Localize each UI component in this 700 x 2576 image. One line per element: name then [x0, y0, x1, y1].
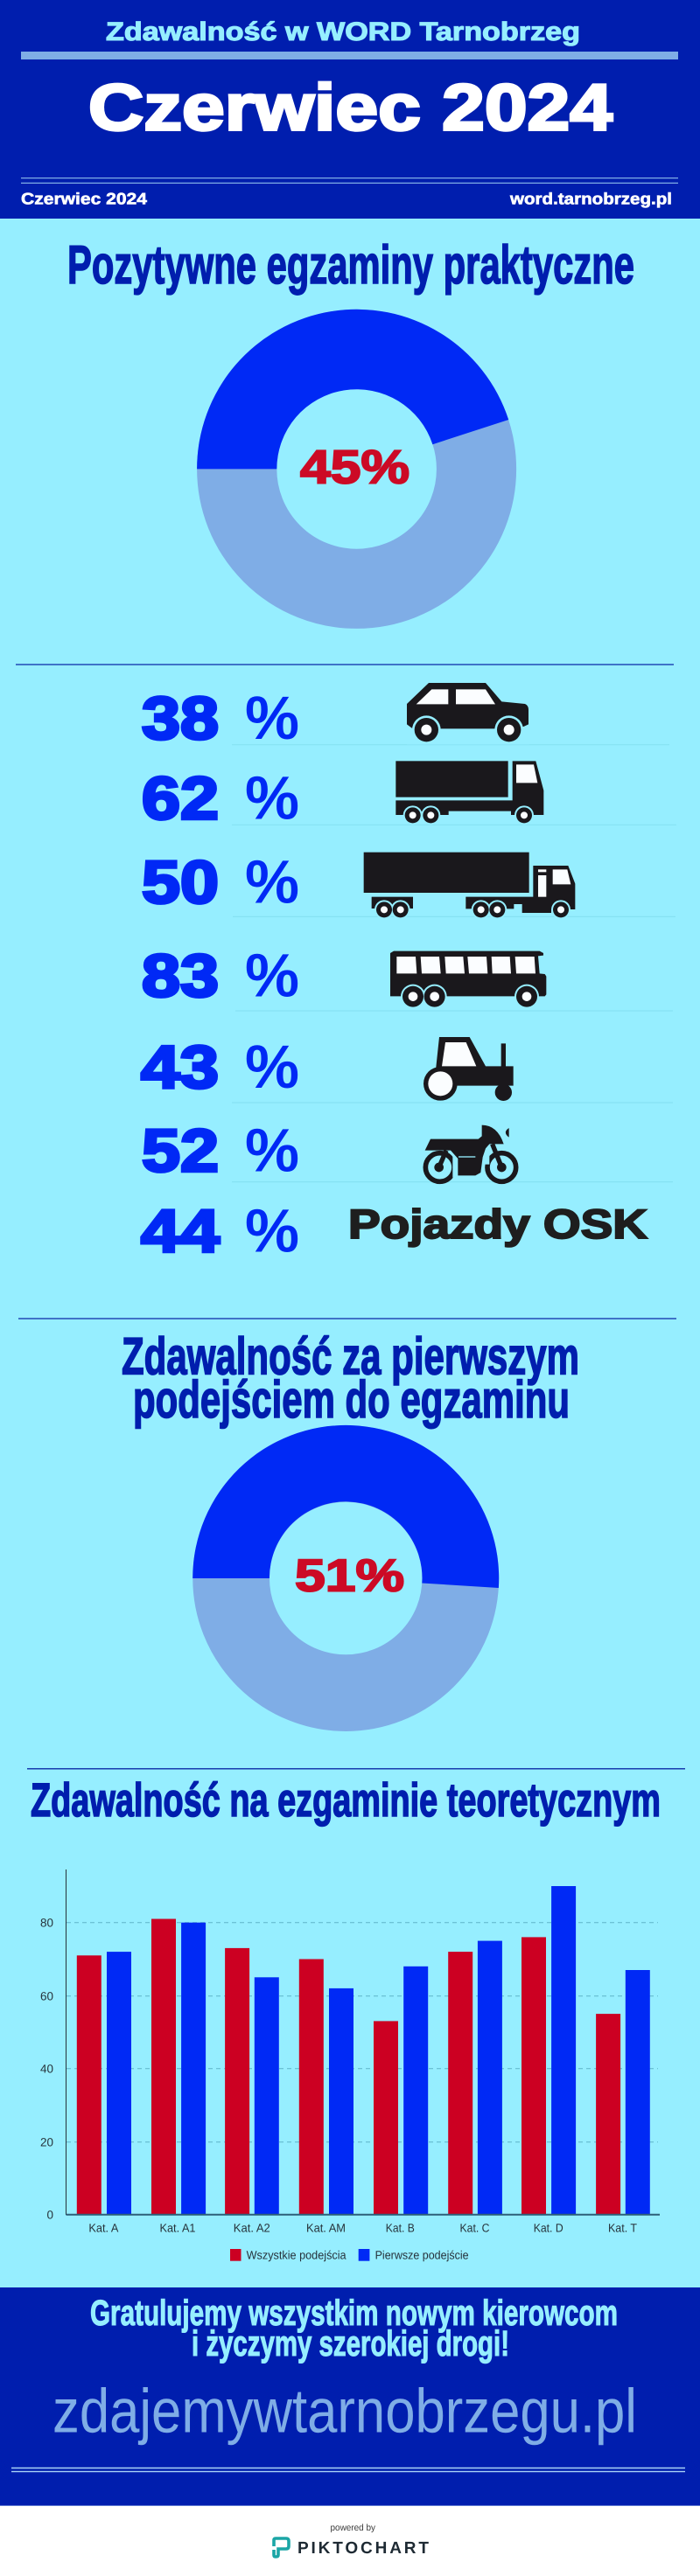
- row: driving school vehicles 44%: %: [245, 1196, 299, 1264]
- legend: Pierwsze podejście: [375, 2249, 469, 2262]
- x axis labels: Kat. A1: [159, 2222, 196, 2235]
- x axis labels: Kat. A2: [234, 2222, 270, 2235]
- x axis labels: [88, 2222, 637, 2235]
- donut chart: first attempt 51%: [192, 1425, 499, 1693]
- row: semi truck 50%: 50: [142, 848, 219, 916]
- row: car 38%: 38: [142, 685, 219, 752]
- row: semi truck 50%: %: [245, 847, 299, 916]
- powered by: powered by: [331, 2523, 376, 2533]
- congratulations text: i życzymy szerokiej drogi!: [192, 2323, 509, 2364]
- row: motorcycle 52%: [142, 1117, 673, 1185]
- y axis labels: [40, 1917, 53, 2222]
- icon: piktochart logo: [274, 2538, 289, 2557]
- row: car 38%: [142, 683, 669, 752]
- donut value: 51%: [295, 1551, 404, 1602]
- row: tractor 43%: 43: [141, 1034, 219, 1101]
- row: car 38%: %: [245, 684, 299, 752]
- legend: Wszystkie podejścia: [247, 2249, 346, 2262]
- x axis labels: Kat. D: [534, 2222, 564, 2235]
- row: driving school vehicles 44%: [141, 1196, 648, 1264]
- header subtitle: Zdawalność w WORD Tarnobrzeg: [106, 17, 580, 46]
- x axis labels: Kat. B: [386, 2222, 415, 2235]
- header website: word.tarnobrzeg.pl: [509, 190, 672, 208]
- panel: closing banner: [0, 2287, 700, 2506]
- y axis labels: 80: [40, 1917, 53, 1930]
- row: tractor 43%: [141, 1033, 673, 1103]
- row: motorcycle 52%: 52: [142, 1117, 219, 1185]
- y axis labels: 0: [46, 2209, 53, 2222]
- row: truck 62%: 62: [142, 764, 219, 832]
- y axis labels: 40: [40, 2063, 53, 2076]
- donut value: 45%: [300, 442, 410, 494]
- x axis labels: Kat. AM: [306, 2222, 346, 2235]
- row: tractor 43%: %: [245, 1033, 299, 1101]
- main title: Czerwiec 2024: [88, 70, 612, 143]
- label: Pojazdy OSK: Pojazdy OSK: [348, 1201, 648, 1247]
- y axis labels: 20: [40, 2136, 53, 2149]
- blue bars: first attempt: [107, 1886, 650, 2215]
- y axis labels: 60: [40, 1990, 53, 2003]
- x axis labels: Kat. T: [608, 2222, 637, 2235]
- icon: car: [407, 683, 529, 744]
- header date: Czerwiec 2024: [21, 190, 148, 208]
- icon: tractor: [424, 1037, 514, 1101]
- row: semi truck 50%: [142, 847, 676, 919]
- x axis labels: Kat. A: [88, 2222, 118, 2235]
- row: bus 83%: 83: [142, 943, 219, 1009]
- congratulations text: [90, 2293, 618, 2364]
- legend: [230, 2249, 469, 2262]
- row: bus 83%: %: [245, 941, 299, 1009]
- donut chart: practical exams 45%: [197, 310, 508, 588]
- heading: first attempt pass rate: [122, 1327, 579, 1429]
- panel: header: [0, 0, 700, 219]
- bar chart: theory exam pass rate: [40, 1869, 660, 2262]
- x axis labels: Kat. C: [460, 2222, 490, 2235]
- row: bus 83%: [142, 941, 673, 1011]
- red bars: all attempts: [77, 1918, 620, 2215]
- panel: branding footer: [0, 2506, 700, 2576]
- icon: truck: [396, 761, 543, 825]
- icon: bus: [390, 951, 546, 1009]
- piktochart wordmark: PIKTOCHART: [298, 2539, 429, 2558]
- row: driving school vehicles 44%: 44: [141, 1197, 220, 1264]
- icon: semi truck: [364, 853, 575, 919]
- icon: motorcycle: [425, 1125, 516, 1181]
- row: truck 62%: [142, 761, 676, 832]
- row: truck 62%: %: [245, 763, 299, 832]
- row: motorcycle 52%: %: [245, 1117, 299, 1185]
